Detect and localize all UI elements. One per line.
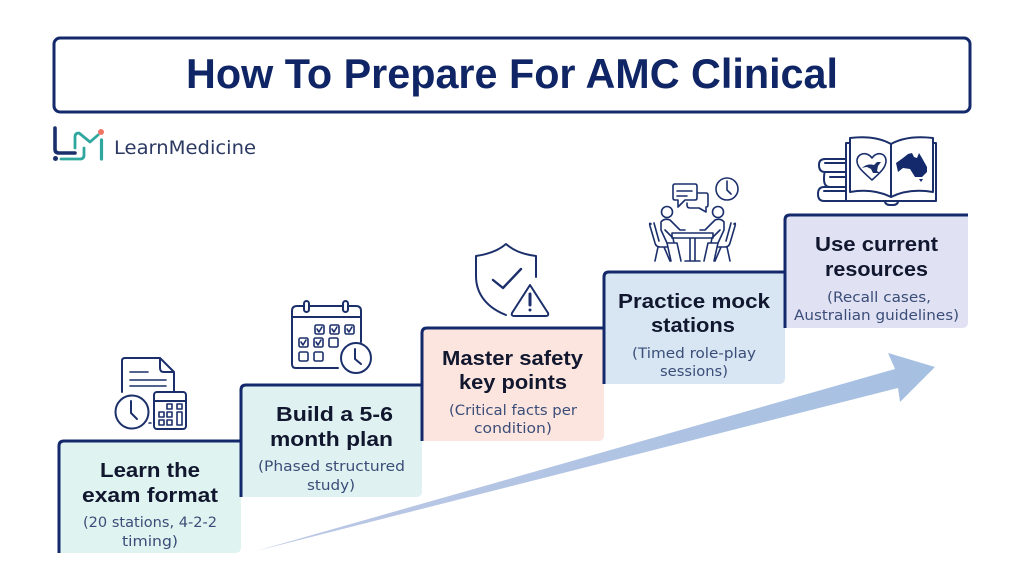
icon: two people at a table with speech bubbles and clock xyxy=(650,178,738,261)
title xyxy=(54,38,970,112)
step 1: learn the exam format: (20 stations, 4-2-2 xyxy=(83,515,217,531)
step 3: master safety key points: key points xyxy=(459,371,567,394)
step 2: build a 5-6 month plan: (Phased structured xyxy=(258,459,405,475)
step 3: master safety key points xyxy=(421,328,604,441)
step 2: build a 5-6 month plan: Build a 5-6 xyxy=(276,403,393,426)
step 2: build a 5-6 month plan xyxy=(240,385,422,497)
icon: books with open guide, heart and map of Australia xyxy=(818,137,936,205)
step 4: practice mock stations: stations xyxy=(651,314,735,337)
logo: LearnMedicine xyxy=(53,128,256,161)
title: How To Prepare For AMC Clinical xyxy=(186,50,838,97)
step 1: learn the exam format: Learn the xyxy=(100,459,200,482)
step 4: practice mock stations: Practice mock xyxy=(618,290,771,313)
arrow: rising progress xyxy=(256,353,935,551)
step 3: master safety key points: condition) xyxy=(474,421,552,437)
step 3: master safety key points: (Critical facts per xyxy=(449,403,577,419)
step 4: practice mock stations xyxy=(603,272,785,384)
step 5: use current resources: Australian guidelines) xyxy=(794,308,959,324)
icon: calendar with clock xyxy=(292,301,371,373)
step 5: use current resources: Use current xyxy=(815,233,938,256)
step 1: learn the exam format: timing) xyxy=(122,534,178,550)
icon detail: kangaroo in heart xyxy=(862,162,881,173)
icon detail: Tasmania xyxy=(919,179,923,182)
logo: LearnMedicine: LearnMedicine xyxy=(114,137,256,159)
step 5: use current resources xyxy=(784,215,968,328)
step 2: build a 5-6 month plan: month plan xyxy=(270,428,393,451)
step 2: build a 5-6 month plan: study) xyxy=(307,478,355,494)
icon: shield with check and warning xyxy=(476,244,548,316)
step 4: practice mock stations: sessions) xyxy=(660,364,728,380)
step 1: learn the exam format xyxy=(58,441,241,553)
icon detail: map of Australia xyxy=(896,153,927,177)
step 3: master safety key points: Master safety xyxy=(442,347,584,370)
step 5: use current resources: (Recall cases, xyxy=(827,290,931,306)
step 4: practice mock stations: (Timed role-play xyxy=(632,346,756,362)
step 1: learn the exam format: exam format xyxy=(82,484,218,507)
icon: document, clock and calculator xyxy=(116,358,186,429)
step 5: use current resources: resources xyxy=(825,258,928,281)
